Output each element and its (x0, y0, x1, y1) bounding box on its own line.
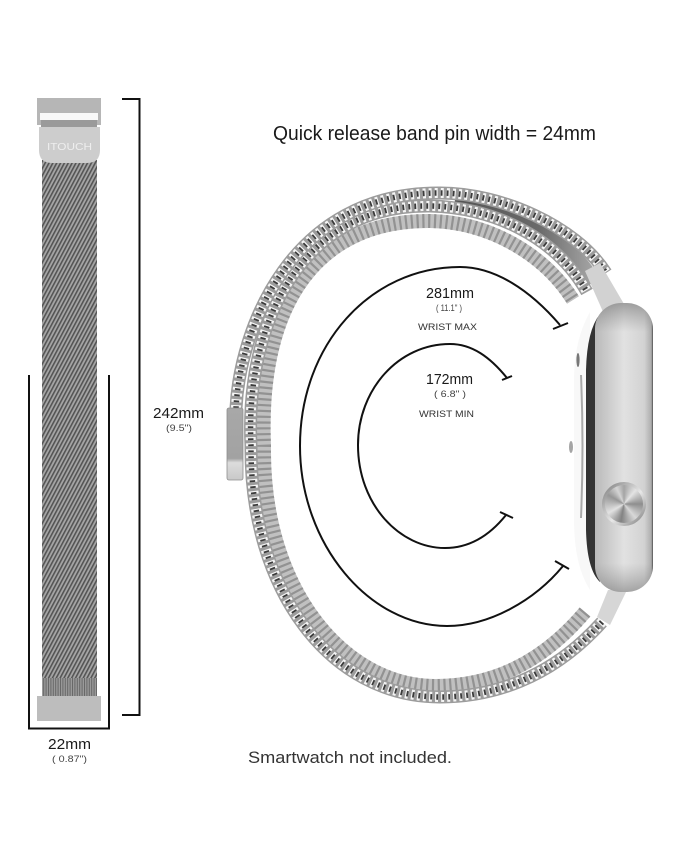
length label: (9.5") (166, 423, 192, 434)
wrist min label (419, 371, 474, 420)
sensor detail (581, 375, 582, 518)
wrist min label: ( 6.8" ) (434, 389, 466, 400)
dark case edge (586, 314, 600, 582)
heading: Quick release band pin width = 24mm (273, 123, 596, 145)
flat mesh band (37, 98, 101, 721)
brand plate (39, 127, 100, 163)
second coil layer (251, 206, 602, 697)
outer coil layer (236, 193, 606, 408)
wrist max label: ( 11.1" ) (436, 303, 462, 314)
wrist max label: 281mm (426, 285, 474, 302)
top clasp (37, 98, 101, 125)
wrist max label (418, 285, 478, 333)
width bracket (29, 375, 109, 728)
dark inner section (455, 200, 594, 282)
case body (595, 303, 653, 592)
wrist min label: 172mm (426, 371, 473, 388)
width label: ( 0.87") (52, 754, 87, 765)
wrist min label: WRIST MIN (419, 409, 474, 420)
crown face (605, 485, 643, 523)
length label (153, 405, 204, 434)
case shading (595, 303, 653, 592)
bottom clasp (37, 696, 101, 721)
wrist max arc (300, 267, 569, 626)
brand text: ITOUCH (47, 141, 92, 153)
mesh strap (42, 160, 97, 697)
top strap connector (585, 263, 624, 314)
wrist max label: WRIST MAX (418, 322, 478, 333)
clasp white slot (40, 113, 98, 120)
width label (48, 736, 91, 765)
watch back sensor (574, 312, 590, 590)
length bracket (122, 99, 140, 715)
watch case (569, 303, 653, 592)
clasp mesh strip (41, 120, 97, 127)
footnote: Smartwatch not included. (248, 748, 452, 767)
sensor window (576, 353, 580, 367)
ribbed inner layer (264, 221, 585, 686)
sensor dot (569, 441, 573, 453)
watch crown (602, 482, 646, 526)
length label: 242mm (153, 405, 204, 422)
looped band (236, 193, 606, 697)
wrist min arc (358, 344, 513, 548)
mesh strap end (42, 678, 97, 697)
band slider clasp (227, 408, 243, 480)
bottom strap connector (597, 590, 627, 625)
width label: 22mm (48, 736, 91, 753)
